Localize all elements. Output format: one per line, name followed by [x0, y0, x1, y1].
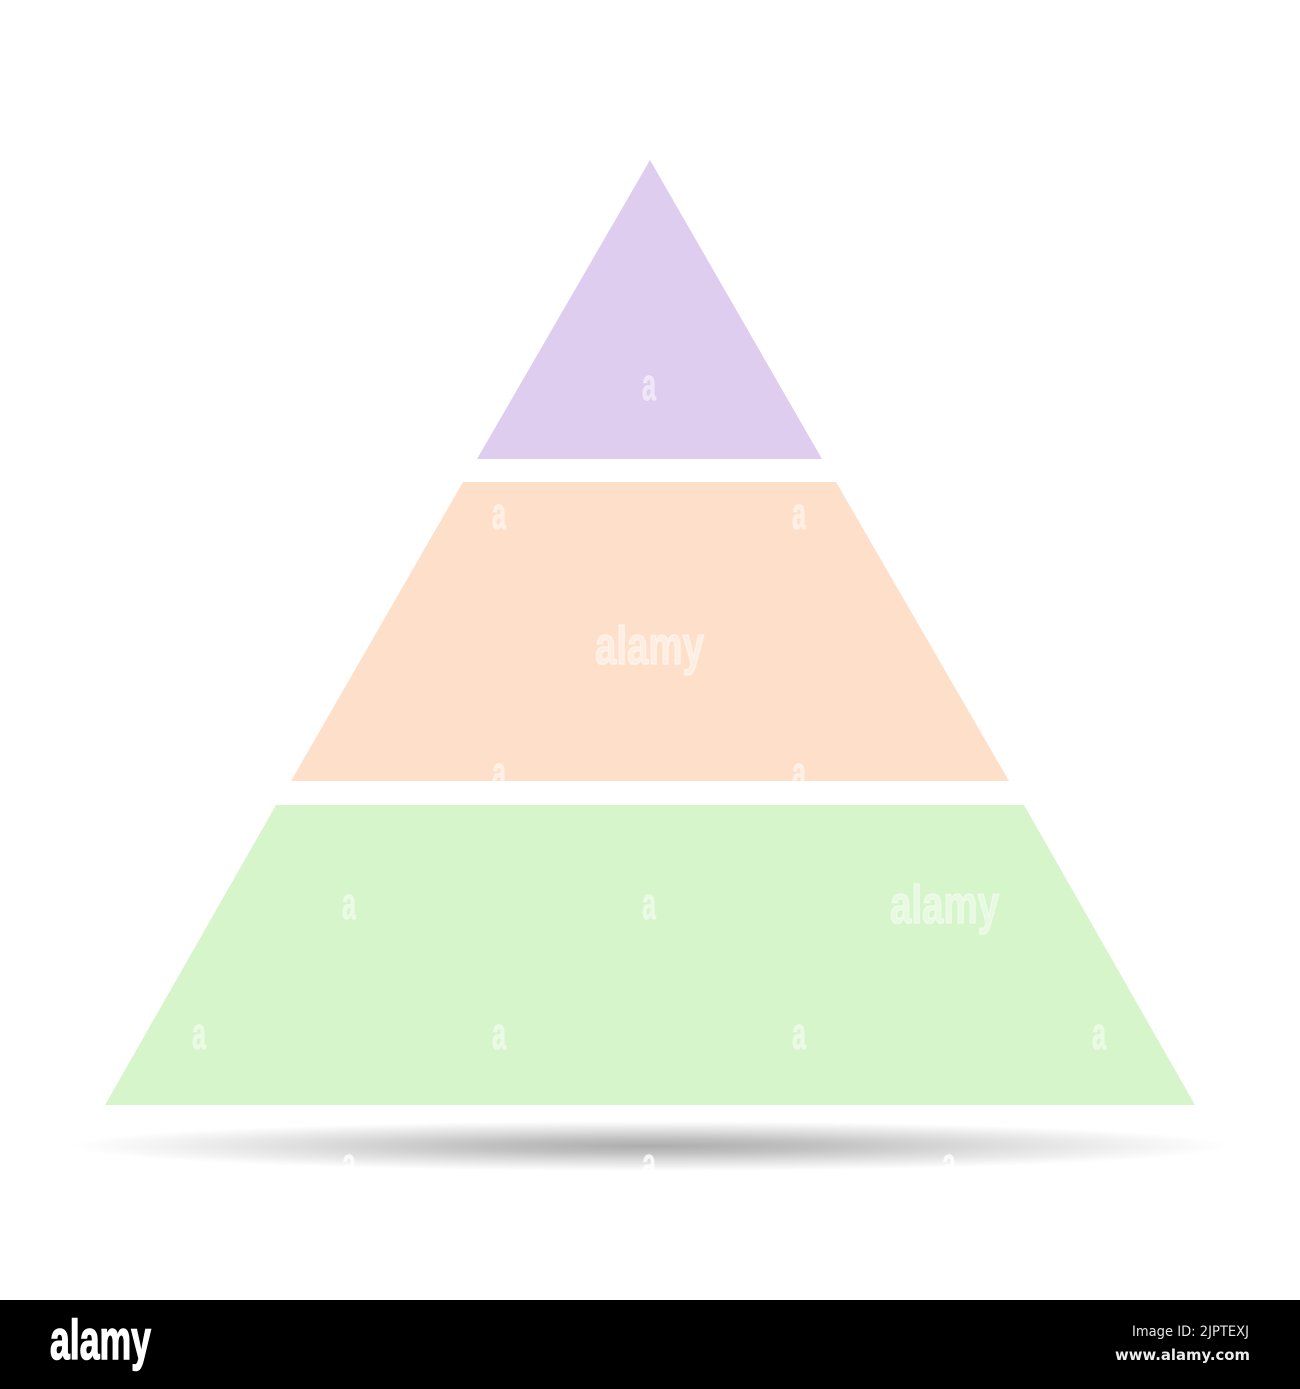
- pyramid ground shadow: [70, 1121, 1230, 1171]
- watermark: small repeated marks: a: [792, 488, 807, 539]
- watermark: small repeated marks: a: [1092, 1008, 1107, 1059]
- watermark: small repeated marks: a: [792, 1008, 807, 1059]
- watermark: large alamy on green tier: alamy: [890, 875, 999, 935]
- watermark: small repeated marks: a: [492, 1008, 507, 1059]
- watermark: small repeated marks: a: [642, 1138, 657, 1189]
- watermark: small repeated marks: a: [942, 1138, 957, 1189]
- watermark: small repeated marks: a: [792, 747, 807, 798]
- watermark: small repeated marks: [192, 359, 1107, 1189]
- watermark: small repeated marks: a: [492, 747, 507, 798]
- footer background: [0, 1300, 1300, 1389]
- watermark: small repeated marks: a: [342, 1138, 357, 1189]
- pyramid chart: [105, 160, 1195, 1105]
- footer image id: Image ID: 2JPTEXJ: [1132, 1324, 1249, 1340]
- watermark: small repeated marks: a: [642, 878, 657, 929]
- footer bar: [0, 1300, 1300, 1389]
- watermark: small repeated marks: a: [642, 359, 657, 410]
- watermark: small repeated marks: a: [492, 488, 507, 539]
- watermark: small repeated marks: a: [342, 878, 357, 929]
- footer logo: alamy: [50, 1308, 151, 1371]
- watermark: large alamy on orange tier: alamy: [595, 616, 704, 676]
- pyramid top tier: purple triangle: [477, 160, 822, 459]
- footer website: www.alamy.com: [1115, 1346, 1250, 1364]
- watermark: small repeated marks: a: [192, 1008, 207, 1059]
- pyramid bottom tier: green trapezoid: [105, 805, 1195, 1105]
- pyramid middle tier: orange trapezoid: [291, 482, 1009, 781]
